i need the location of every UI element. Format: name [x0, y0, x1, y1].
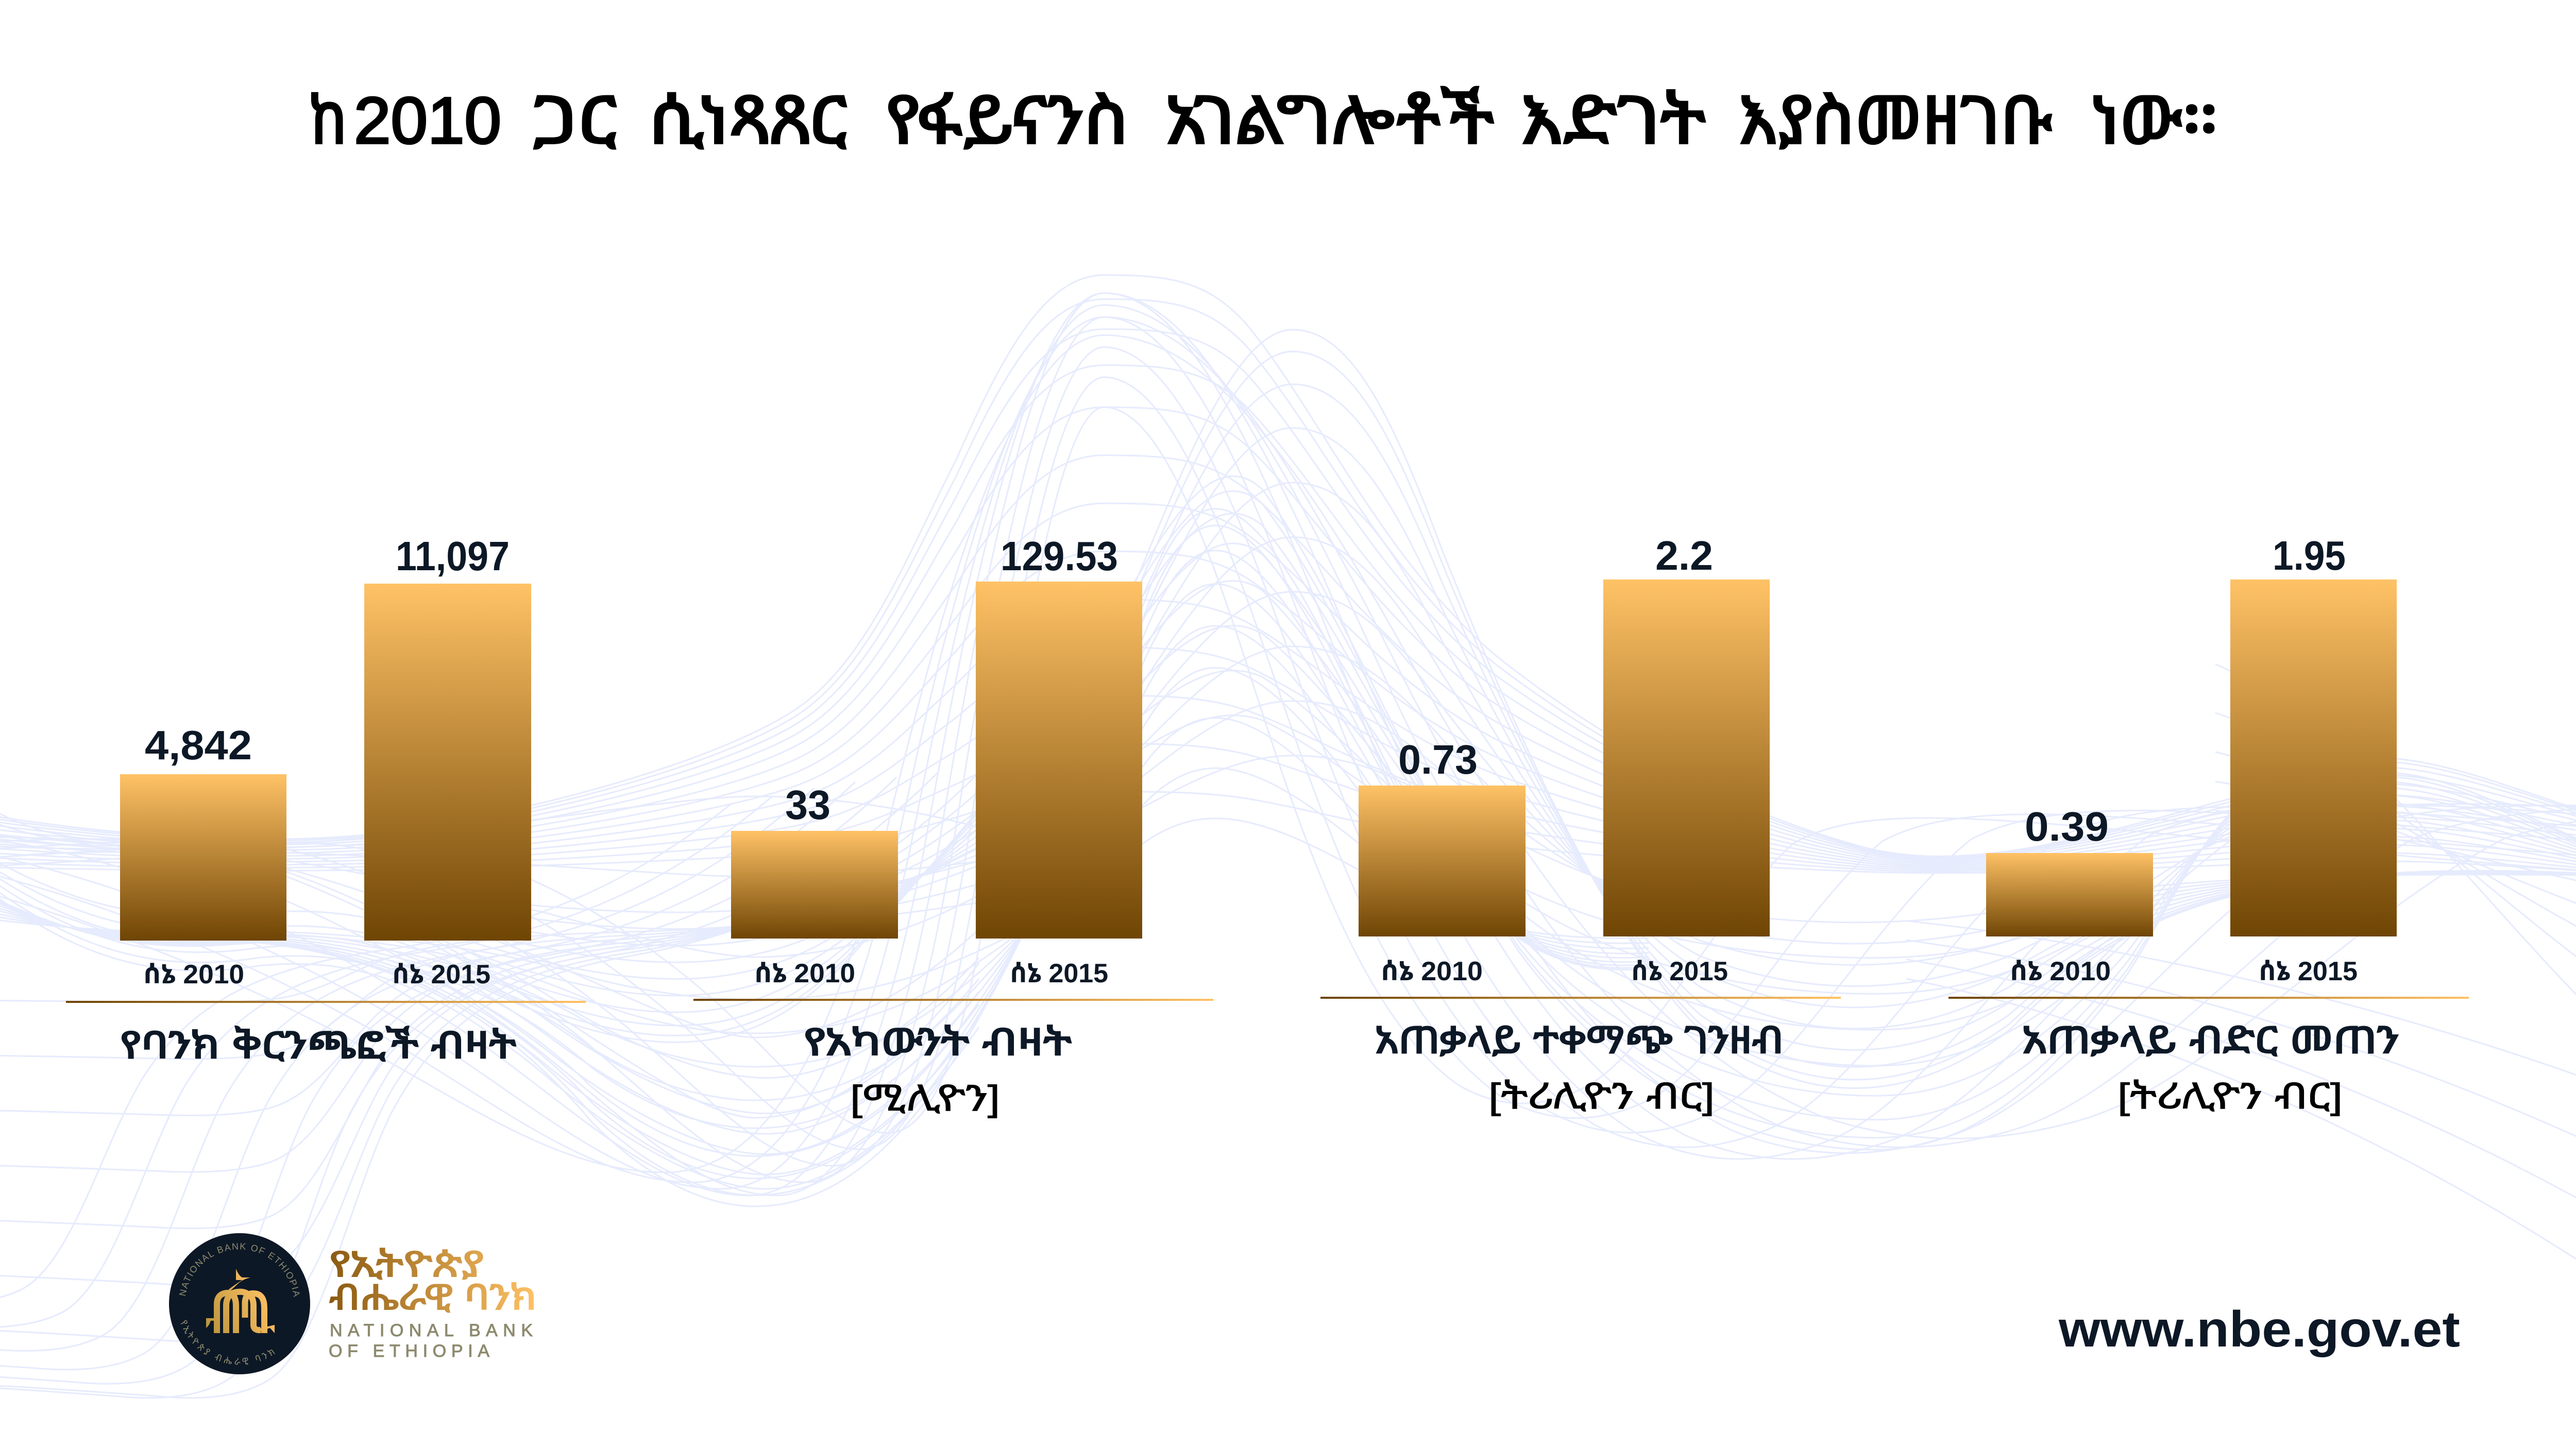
title: ጋር — [533, 84, 617, 158]
bar: 2015 accounts — [976, 582, 1142, 939]
title: ሲነጻጸር — [649, 84, 847, 158]
seal top text: NATIONAL BANK OF ETHIOPIA — [179, 1243, 300, 1297]
axis label 2010: ሰኔ 2010 — [143, 960, 244, 990]
title: እያስመዘገቡ — [1738, 84, 2052, 158]
icon: seal disc — [169, 1233, 310, 1374]
panel: total deposits — [1320, 533, 1841, 1116]
category label: የባንክ ቅርንጫፎች ብዛት — [120, 1025, 516, 1066]
background wave mesh — [0, 275, 2576, 1398]
title: የፋይናንስ — [886, 84, 1129, 158]
bar: 2010 branches — [120, 774, 286, 941]
wordmark amharic line 1: የኢትዮጵያ — [329, 1245, 484, 1284]
title: አገልግሎቶች — [1165, 84, 1494, 158]
wordmark amharic line 2: ብሔራዊ ባንክ — [329, 1278, 537, 1317]
value: 11,097: 11,097 — [396, 533, 510, 579]
logo: National Bank of Ethiopia — [169, 1233, 537, 1374]
rule — [1948, 997, 2469, 999]
bar: 2015 credit — [2230, 579, 2397, 936]
title: 2010 — [354, 84, 501, 158]
seal bottom text: የኢትዮጵያ ብሔራዊ ባንክ — [181, 1320, 275, 1365]
rule — [66, 1001, 586, 1003]
axis label 2010: ሰኔ 2010 — [754, 959, 855, 988]
bar: 2015 deposits — [1603, 579, 1770, 936]
axis label 2015: ሰኔ 2015 — [2259, 957, 2358, 986]
wordmark english line 2: OF ETHIOPIA — [329, 1341, 489, 1361]
wordmark english line 1: NATIONAL BANK — [330, 1321, 533, 1340]
rule — [1320, 997, 1841, 999]
axis label 2015: ሰኔ 2015 — [1010, 959, 1108, 988]
value: 4,842: 4,842 — [145, 722, 252, 768]
axis label 2010: ሰኔ 2010 — [2010, 957, 2111, 986]
axis label 2010: ሰኔ 2010 — [1381, 957, 1483, 986]
unit label: [ትሪሊዮን ብር] — [2117, 1076, 2343, 1116]
panel: bank branches — [66, 533, 586, 1066]
bar: 2010 credit — [1986, 853, 2153, 936]
axis label 2015: ሰኔ 2015 — [392, 960, 490, 990]
unit label: [ሚሊዮን] — [850, 1078, 1000, 1118]
rule — [693, 999, 1213, 1001]
panel: total credit — [1948, 533, 2469, 1116]
category label: አጠቃላይ ብድር መጠን — [2022, 1020, 2399, 1061]
value: 129.53: 129.53 — [1001, 533, 1118, 579]
value: 1.95: 1.95 — [2273, 533, 2346, 578]
unit label: [ትሪሊዮን ብር] — [1488, 1076, 1715, 1116]
title — [309, 84, 2218, 158]
axis label 2015: ሰኔ 2015 — [1631, 957, 1728, 986]
bar: 2010 deposits — [1359, 786, 1526, 936]
category label: የአካውንት ብዛት — [804, 1022, 1072, 1063]
icon: gold emblem — [206, 1269, 275, 1333]
category label: አጠቃላይ ተቀማጭ ገንዘብ — [1375, 1020, 1784, 1061]
website url: www.nbe.gov.et — [2058, 1301, 2460, 1357]
bar: 2015 branches — [364, 584, 531, 941]
value: 33: 33 — [785, 782, 831, 828]
value: 0.39: 0.39 — [2025, 804, 2109, 849]
value: 0.73: 0.73 — [1398, 737, 1478, 782]
title: እድገት — [1520, 84, 1706, 158]
title: ከ — [309, 84, 347, 158]
value: 2.2: 2.2 — [1655, 533, 1713, 578]
title: ነው። — [2090, 84, 2218, 158]
bar: 2010 accounts — [731, 831, 898, 939]
panel: accounts — [693, 533, 1213, 1118]
